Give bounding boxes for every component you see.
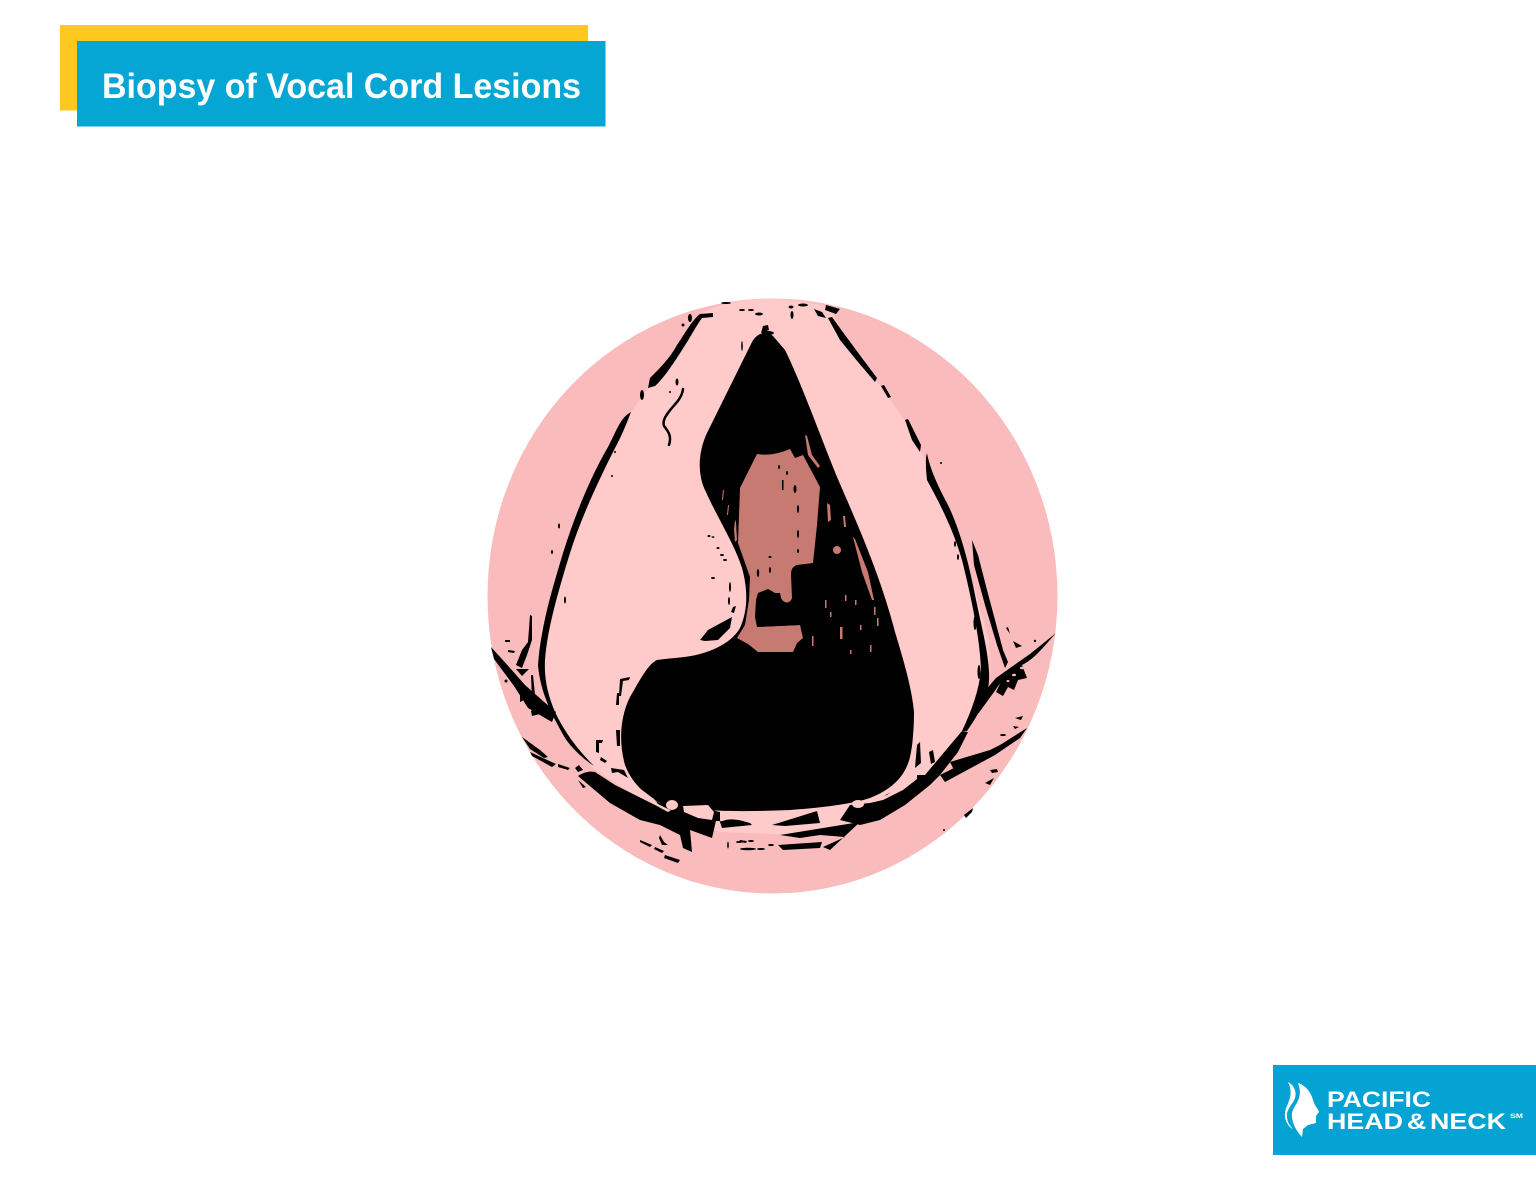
arrowhead fold shapes, centre	[772, 811, 820, 826]
tracheal wall pink area	[737, 449, 820, 652]
left lower band	[578, 772, 718, 852]
scattered specks lower left	[522, 737, 548, 758]
right lower band	[840, 731, 968, 825]
illustration: larynx and vocal cords view in circle	[488, 298, 1058, 894]
inner light tissue	[541, 299, 990, 835]
dark band under opening, left	[640, 795, 750, 825]
left upper fold line	[648, 313, 713, 388]
small marks in tracheal area	[757, 465, 799, 577]
left diagonal fold	[491, 647, 556, 722]
cartilage outline strokes and mucosal folds	[491, 302, 1056, 863]
logo wordmark: PACIFIC	[1327, 1087, 1431, 1112]
glottis dark opening	[621, 333, 914, 811]
title text: Biopsy of Vocal Cord Lesions	[102, 67, 581, 106]
pink flecks inside dark opening	[722, 435, 878, 654]
right main fold line	[828, 317, 877, 382]
light blobs along the lower rim of the opening	[617, 775, 714, 820]
top specks	[825, 305, 840, 314]
left main fold line	[538, 412, 631, 766]
lace holes in the right diagonal fold	[1006, 667, 1024, 682]
left vertical wisps	[516, 615, 532, 668]
bracket specks left of opening	[619, 677, 630, 696]
title banner	[60, 25, 606, 126]
wiggle line on left tissue	[664, 389, 683, 445]
right diagonal fold	[978, 633, 1056, 714]
logo: Pacific Head & Neck: SM	[1510, 1113, 1523, 1120]
light crescent under opening, right	[852, 772, 917, 808]
dashes beneath centre	[739, 840, 747, 843]
dark sliver on left fold	[700, 617, 732, 641]
scattered specks lower right	[964, 808, 973, 818]
icon: face profile	[1285, 1082, 1319, 1137]
logo: Pacific Head & Neck: HEAD & NECK	[1327, 1109, 1507, 1134]
black band inside the lower tracheal area	[757, 609, 800, 627]
logo: Pacific Head & Neck	[1273, 1065, 1536, 1155]
outer tissue circle	[488, 298, 1058, 894]
